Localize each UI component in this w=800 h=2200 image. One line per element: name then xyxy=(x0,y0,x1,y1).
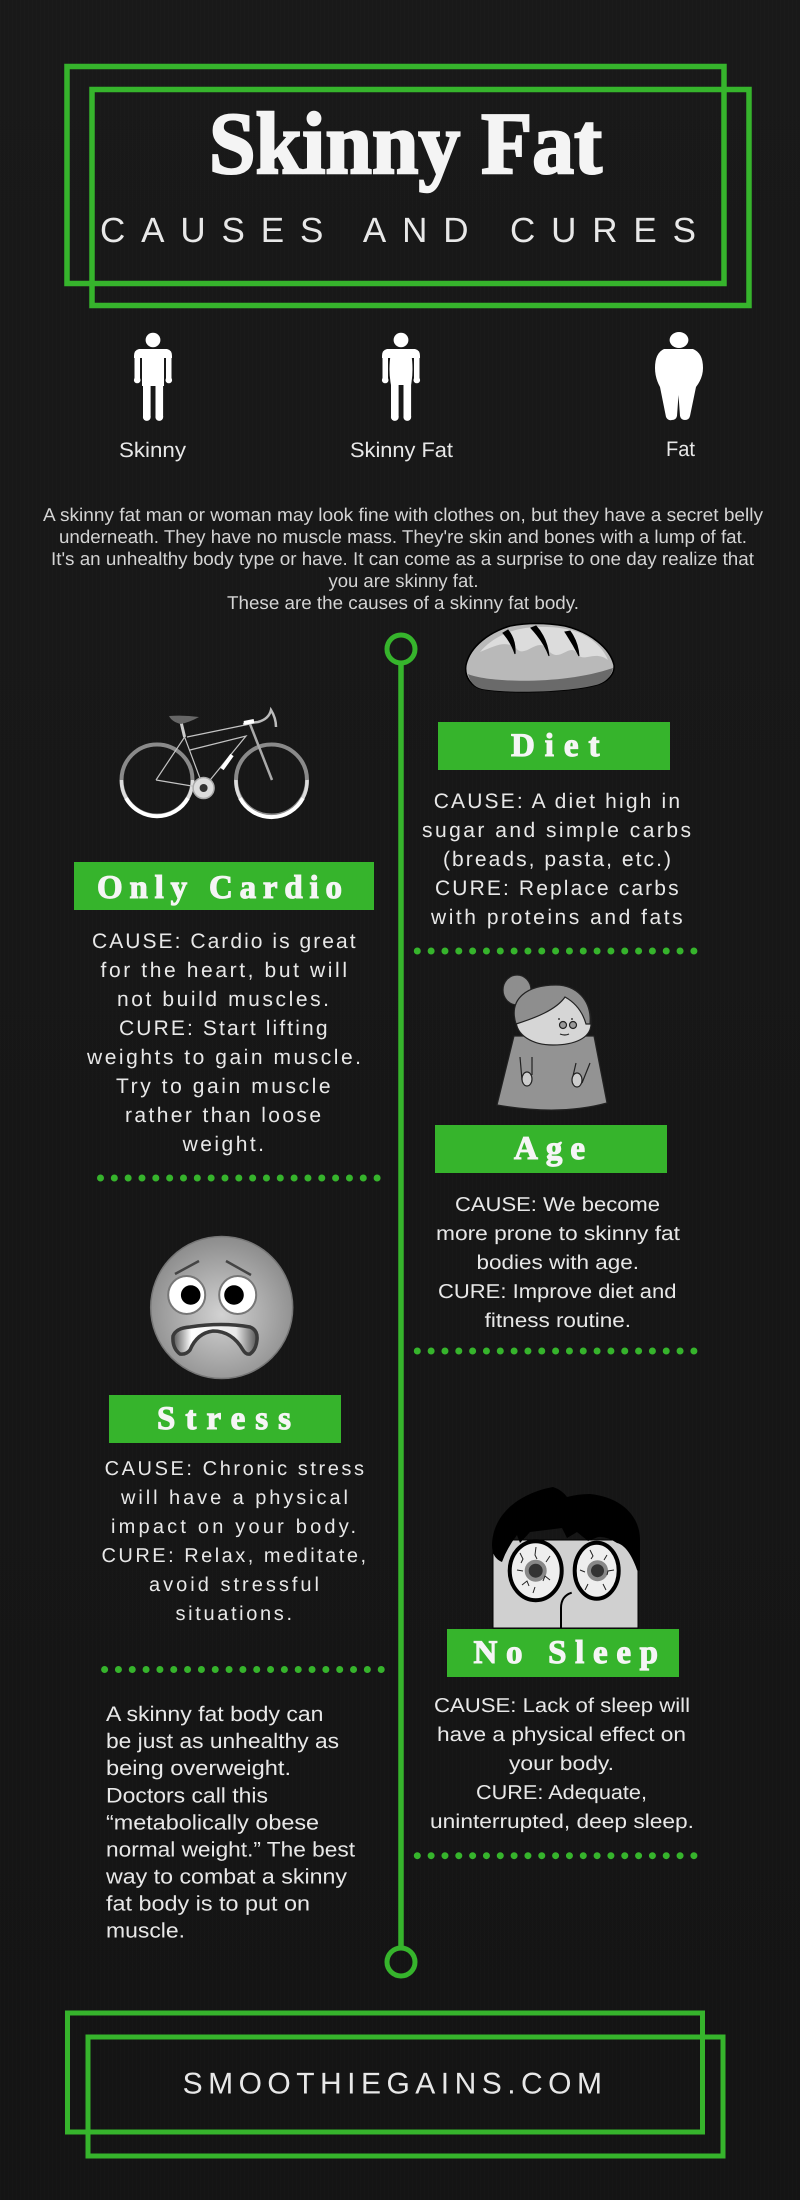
body text: bodies with age. xyxy=(476,1252,639,1274)
icon: bicycle xyxy=(121,710,307,817)
icon: skinny figure xyxy=(134,333,172,421)
heading bar xyxy=(109,1395,341,1443)
icon: skinny fat figure xyxy=(382,333,420,421)
dotted divider xyxy=(105,1666,382,1673)
body text: not build muscles. xyxy=(117,988,329,1011)
intro text: It's an unhealthy body type or have. It can come as a surprise to one day realize that xyxy=(51,548,754,569)
icon: fat figure xyxy=(655,332,703,420)
icon: grandmother xyxy=(497,975,607,1110)
dotted divider xyxy=(100,1174,378,1182)
body text: impact on your body. xyxy=(111,1516,356,1538)
body text: situations. xyxy=(176,1603,292,1625)
closing text block: Doctors call this xyxy=(106,1784,268,1808)
icon: bread xyxy=(466,624,614,692)
heading: Only Cardio xyxy=(97,870,342,906)
panel: only cardio xyxy=(74,710,378,1178)
dotted divider xyxy=(417,1852,695,1859)
panel: stress xyxy=(102,1236,382,1670)
body text: have a physical effect on xyxy=(437,1724,686,1746)
body text: CURE: Adequate, xyxy=(476,1782,647,1804)
body text: uninterrupted, deep sleep. xyxy=(430,1811,694,1833)
body text: rather than loose xyxy=(125,1104,321,1127)
body text: more prone to skinny fat xyxy=(436,1223,680,1245)
footer frame front xyxy=(88,2037,723,2156)
body text: for the heart, but will xyxy=(100,959,347,982)
body text xyxy=(430,1695,694,1833)
dotted divider xyxy=(417,948,695,954)
footer frame back xyxy=(68,2013,702,2132)
body text: CURE: Replace carbs xyxy=(435,877,679,900)
body text: CAUSE: Chronic stress xyxy=(105,1458,364,1480)
heading bar xyxy=(438,722,670,770)
closing text block: be just as unhealthy as xyxy=(106,1730,339,1753)
body text: your body. xyxy=(509,1753,614,1775)
closing text block: “metabolically obese xyxy=(106,1812,319,1834)
intro text: A skinny fat man or woman may look fine with clothes on, but they have a secret belly xyxy=(43,504,764,525)
heading: Diet xyxy=(511,728,600,764)
body text: weight. xyxy=(182,1133,264,1156)
panel: no sleep xyxy=(417,1487,695,1856)
closing text block xyxy=(105,1703,355,1942)
heading bar xyxy=(74,862,374,910)
label: skinny: Skinny xyxy=(119,439,187,462)
heading bar xyxy=(435,1125,667,1173)
intro text xyxy=(43,504,764,613)
body text: CAUSE: A diet high in xyxy=(434,790,680,813)
footer panel xyxy=(68,2013,723,2156)
body text: avoid stressful xyxy=(149,1574,319,1596)
body text: Try to gain muscle xyxy=(116,1075,331,1098)
body types row xyxy=(119,332,703,462)
subtitle: CAUSES AND CURES xyxy=(100,211,696,250)
body text: CAUSE: We become xyxy=(455,1194,660,1216)
body text: CAUSE: Lack of sleep will xyxy=(434,1695,690,1717)
closing text block: being overweight. xyxy=(106,1757,291,1780)
icon: worried face xyxy=(151,1236,293,1378)
timeline xyxy=(387,635,415,1976)
closing text block: fat body is to put on xyxy=(106,1892,310,1916)
label: fat: Fat xyxy=(666,438,695,461)
closing text block: muscle. xyxy=(106,1920,185,1942)
icon: sleepless face xyxy=(492,1487,640,1628)
panel: diet xyxy=(417,624,695,951)
closing text block: normal weight.” The best xyxy=(106,1838,355,1862)
intro text: These are the causes of a skinny fat body. xyxy=(227,592,579,613)
header panel xyxy=(67,66,749,306)
body text xyxy=(102,1458,366,1625)
body text xyxy=(86,930,361,1156)
heading bar xyxy=(447,1629,679,1677)
body text: sugar and simple carbs xyxy=(422,819,691,842)
header frame front xyxy=(92,90,749,306)
body text: CURE: Start lifting xyxy=(119,1017,328,1040)
heading: Age xyxy=(514,1131,585,1167)
body text: fitness routine. xyxy=(485,1310,631,1332)
body text: CURE: Improve diet and xyxy=(438,1281,676,1303)
dotted divider xyxy=(417,1348,695,1354)
closing text block: A skinny fat body can xyxy=(106,1703,324,1726)
body text: will have a physical xyxy=(120,1487,348,1509)
header frame back xyxy=(67,66,724,284)
title: Skinny Fat xyxy=(209,96,602,193)
body text: CURE: Relax, meditate, xyxy=(102,1545,366,1567)
body text: with proteins and fats xyxy=(430,906,683,929)
closing text block: way to combat a skinny xyxy=(105,1866,348,1888)
panel: age xyxy=(417,975,695,1351)
intro text: you are skinny fat. xyxy=(328,570,478,591)
body text: weights to gain muscle. xyxy=(86,1046,361,1069)
heading: No Sleep xyxy=(474,1635,658,1671)
heading: Stress xyxy=(157,1401,291,1437)
body text: CAUSE: Cardio is great xyxy=(92,930,356,953)
body text: (breads, pasta, etc.) xyxy=(443,848,671,871)
body text xyxy=(422,790,691,929)
label: skinny fat: Skinny Fat xyxy=(350,439,453,462)
body text xyxy=(436,1194,680,1332)
website: SMOOTHIEGAINS.COM xyxy=(183,2068,602,2100)
intro text: underneath. They have no muscle mass. They're skin and bones with a lump of fat. xyxy=(59,526,747,547)
